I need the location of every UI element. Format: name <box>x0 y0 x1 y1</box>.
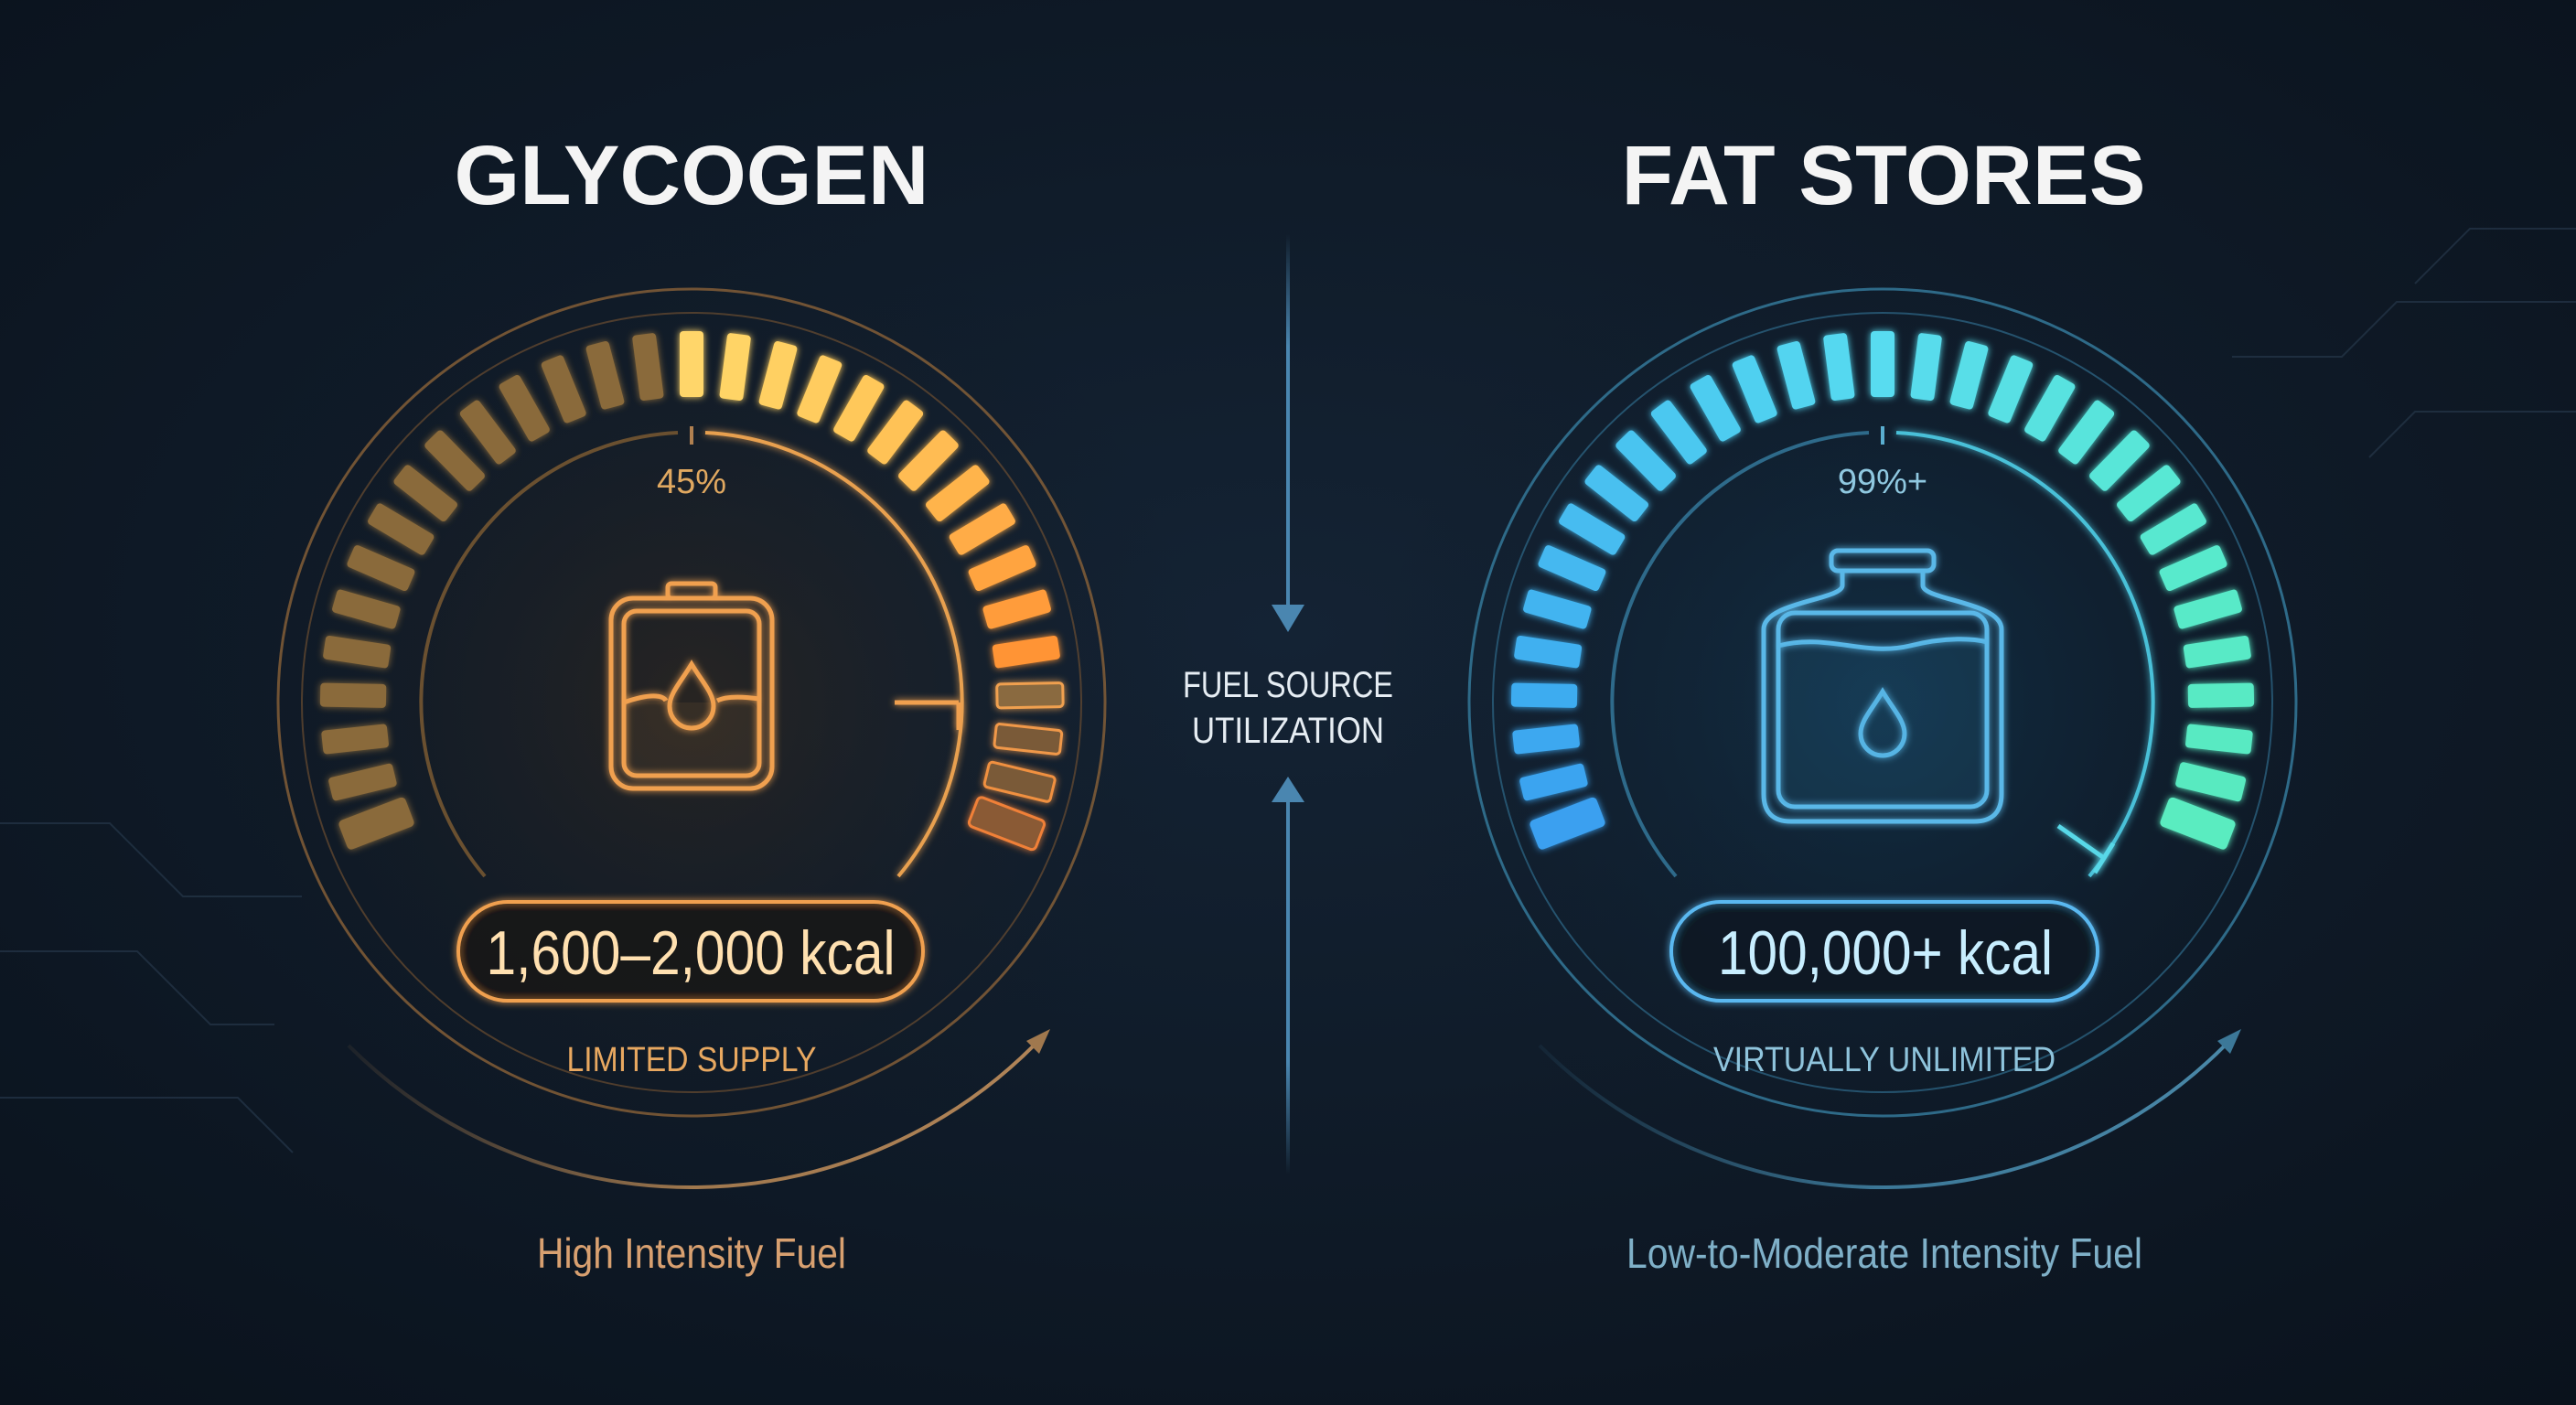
label: limited supply: LIMITED SUPPLY <box>567 1041 816 1079</box>
inner arc <box>421 433 678 876</box>
title: fat stores: FAT STORES <box>1621 129 2146 222</box>
caption: low-to-moderate: Low-to-Moderate Intensity Fuel <box>1626 1229 2142 1277</box>
icon: jar <box>1764 551 2002 821</box>
pill: glycogen kcal <box>458 902 923 1001</box>
label: 99%+: 99%+ <box>1838 463 1927 501</box>
center: fuel source utilization: FUEL SOURCE <box>1183 665 1393 705</box>
pill: fat kcal: 100,000+ kcal <box>1718 918 2053 988</box>
needle: 99% <box>2058 826 2113 873</box>
label: virtually unlimited: VIRTUALLY UNLIMITED <box>1713 1041 2055 1079</box>
title: glycogen: GLYCOGEN <box>454 129 929 222</box>
gauge ticks: fat stores <box>1511 331 2254 851</box>
center: fuel source utilization <box>1183 234 1393 1174</box>
gauge: fat stores <box>1469 289 2296 1187</box>
pill: fat kcal <box>1671 902 2098 1001</box>
gauge: glycogen <box>278 289 1105 1187</box>
label: 45%: 45% <box>657 463 726 501</box>
pill: glycogen kcal: 1,600–2,000 kcal <box>487 918 895 988</box>
caption: high intensity: High Intensity Fuel <box>537 1229 846 1277</box>
gauge ticks: glycogen <box>320 331 1063 851</box>
bottom arrow arc <box>1540 1029 2241 1187</box>
inner arc <box>1612 433 1869 876</box>
needle: 45% <box>895 702 959 730</box>
bottom arrow arc <box>349 1029 1050 1187</box>
center: fuel source utilization: UTILIZATION <box>1192 711 1384 751</box>
icon: battery <box>611 584 772 788</box>
